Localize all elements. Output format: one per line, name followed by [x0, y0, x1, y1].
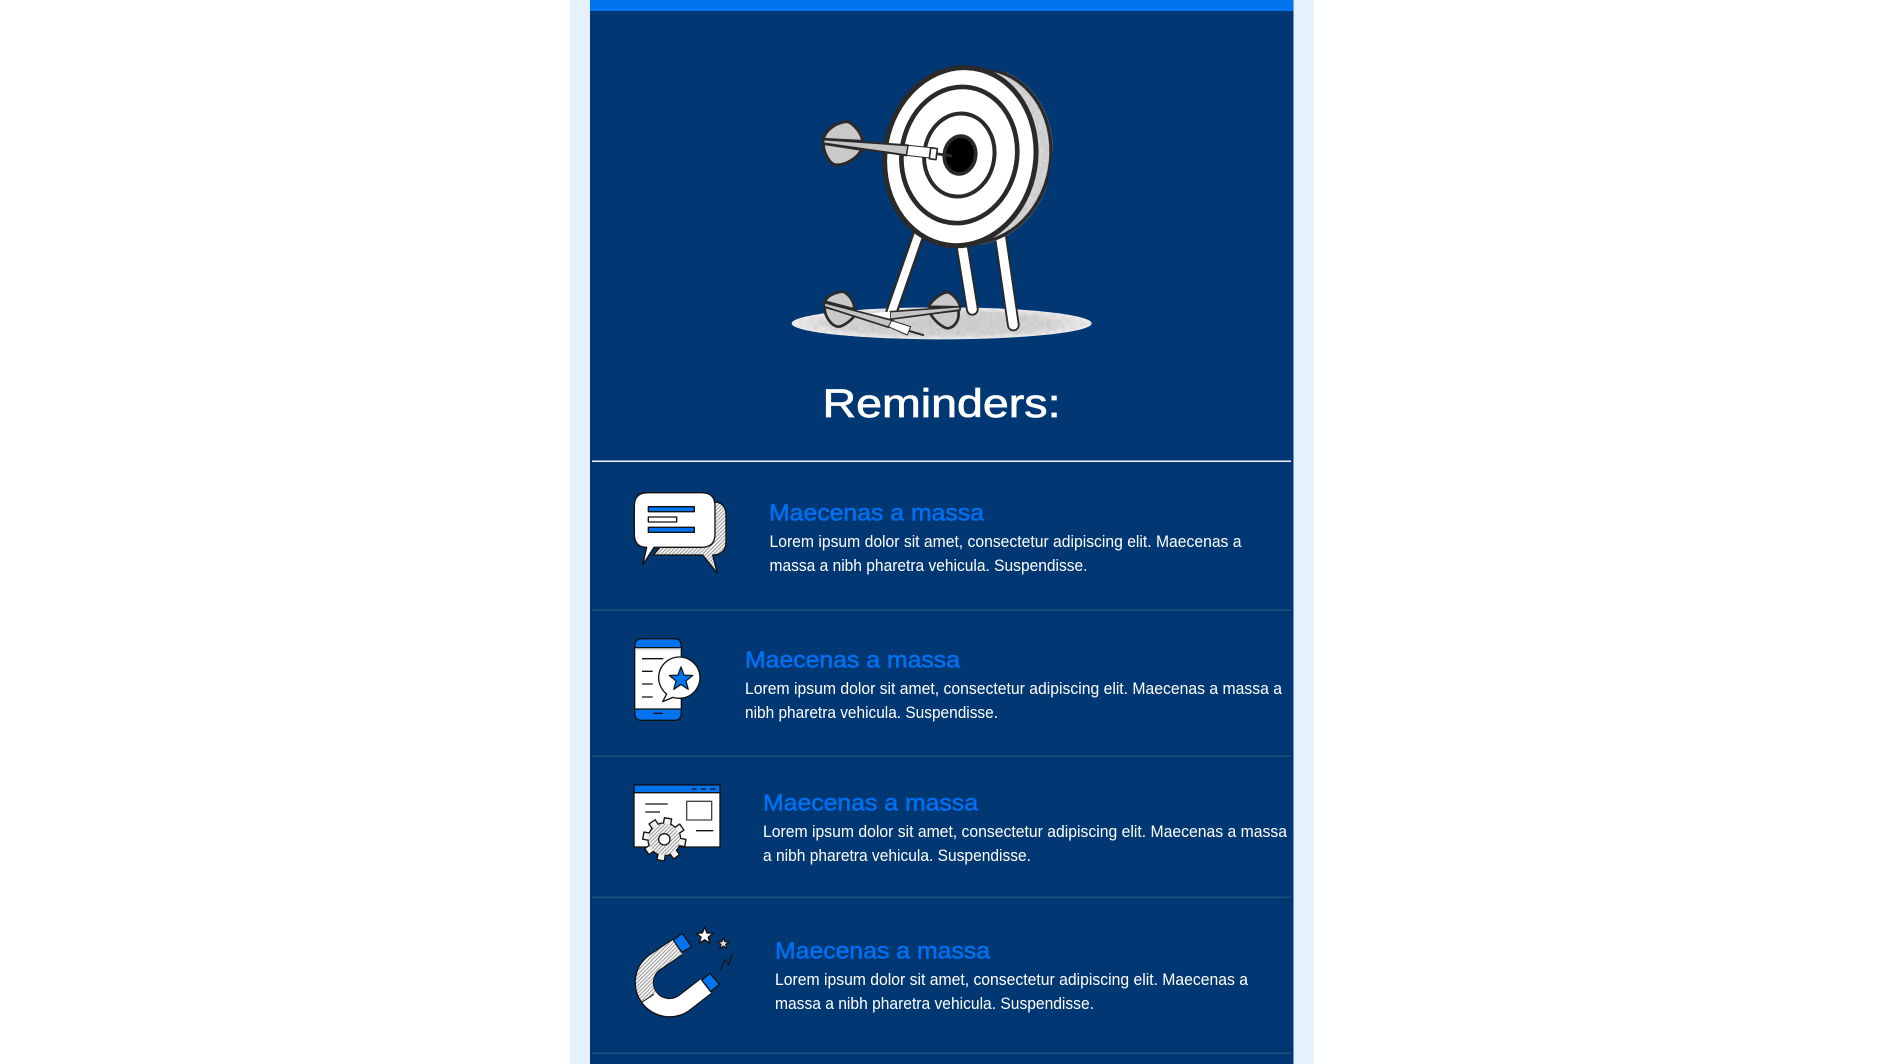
- item 4 text: [775, 971, 1249, 1013]
- item 4: magnet: [642, 927, 1249, 1013]
- icon: phone with star bubble: [635, 639, 700, 720]
- item 3 text: [763, 823, 1288, 865]
- target face and rings: [872, 57, 1049, 257]
- illustration: dartboard target with darts: [792, 57, 1092, 339]
- light side panel: [570, 0, 1314, 1064]
- item 3 text: Lorem ipsum dolor sit amet, consectetur adipiscing elit. Maecenas a massa: [763, 823, 1288, 841]
- item 1 text: Lorem ipsum dolor sit amet, consectetur adipiscing elit. Maecenas a: [770, 533, 1242, 551]
- item 4 heading: Maecenas a massa: [775, 938, 991, 964]
- fallen darts: [824, 292, 960, 335]
- item 3 heading: Maecenas a massa: [763, 790, 979, 816]
- item 1: messages: [634, 493, 1242, 575]
- target legs: [892, 233, 1013, 325]
- item 4 text: Lorem ipsum dolor sit amet, consectetur adipiscing elit. Maecenas a: [775, 971, 1249, 989]
- item 1 heading: Maecenas a massa: [769, 500, 985, 526]
- icon: browser window with gear: [634, 785, 720, 861]
- item 1 text: massa a nibh pharetra vehicula. Suspendisse.: [770, 557, 1088, 575]
- title divider: [592, 460, 1291, 462]
- item 2 text: Lorem ipsum dolor sit amet, consectetur adipiscing elit. Maecenas a massa a: [745, 680, 1283, 698]
- dart in bullseye: [823, 122, 952, 165]
- main navy panel: [590, 0, 1294, 1064]
- item 3 text: a nibh pharetra vehicula. Suspendisse.: [763, 847, 1031, 865]
- icon: speech bubbles: [634, 493, 726, 573]
- item 2 text: nibh pharetra vehicula. Suspendisse.: [745, 704, 998, 722]
- item 2 text: [745, 680, 1283, 722]
- item 4 text: massa a nibh pharetra vehicula. Suspendisse.: [775, 995, 1094, 1013]
- target body: [889, 57, 1065, 255]
- item 1 text: [770, 533, 1242, 575]
- item 2: mobile rating: [635, 639, 1283, 722]
- icon: horseshoe magnet with stars: [642, 927, 733, 1008]
- ground shadow: [792, 307, 1092, 339]
- top accent bar: [590, 0, 1294, 11]
- item 3: settings window: [634, 785, 1288, 865]
- title: Reminders:: [822, 382, 1060, 426]
- item 2 heading: Maecenas a massa: [745, 646, 961, 672]
